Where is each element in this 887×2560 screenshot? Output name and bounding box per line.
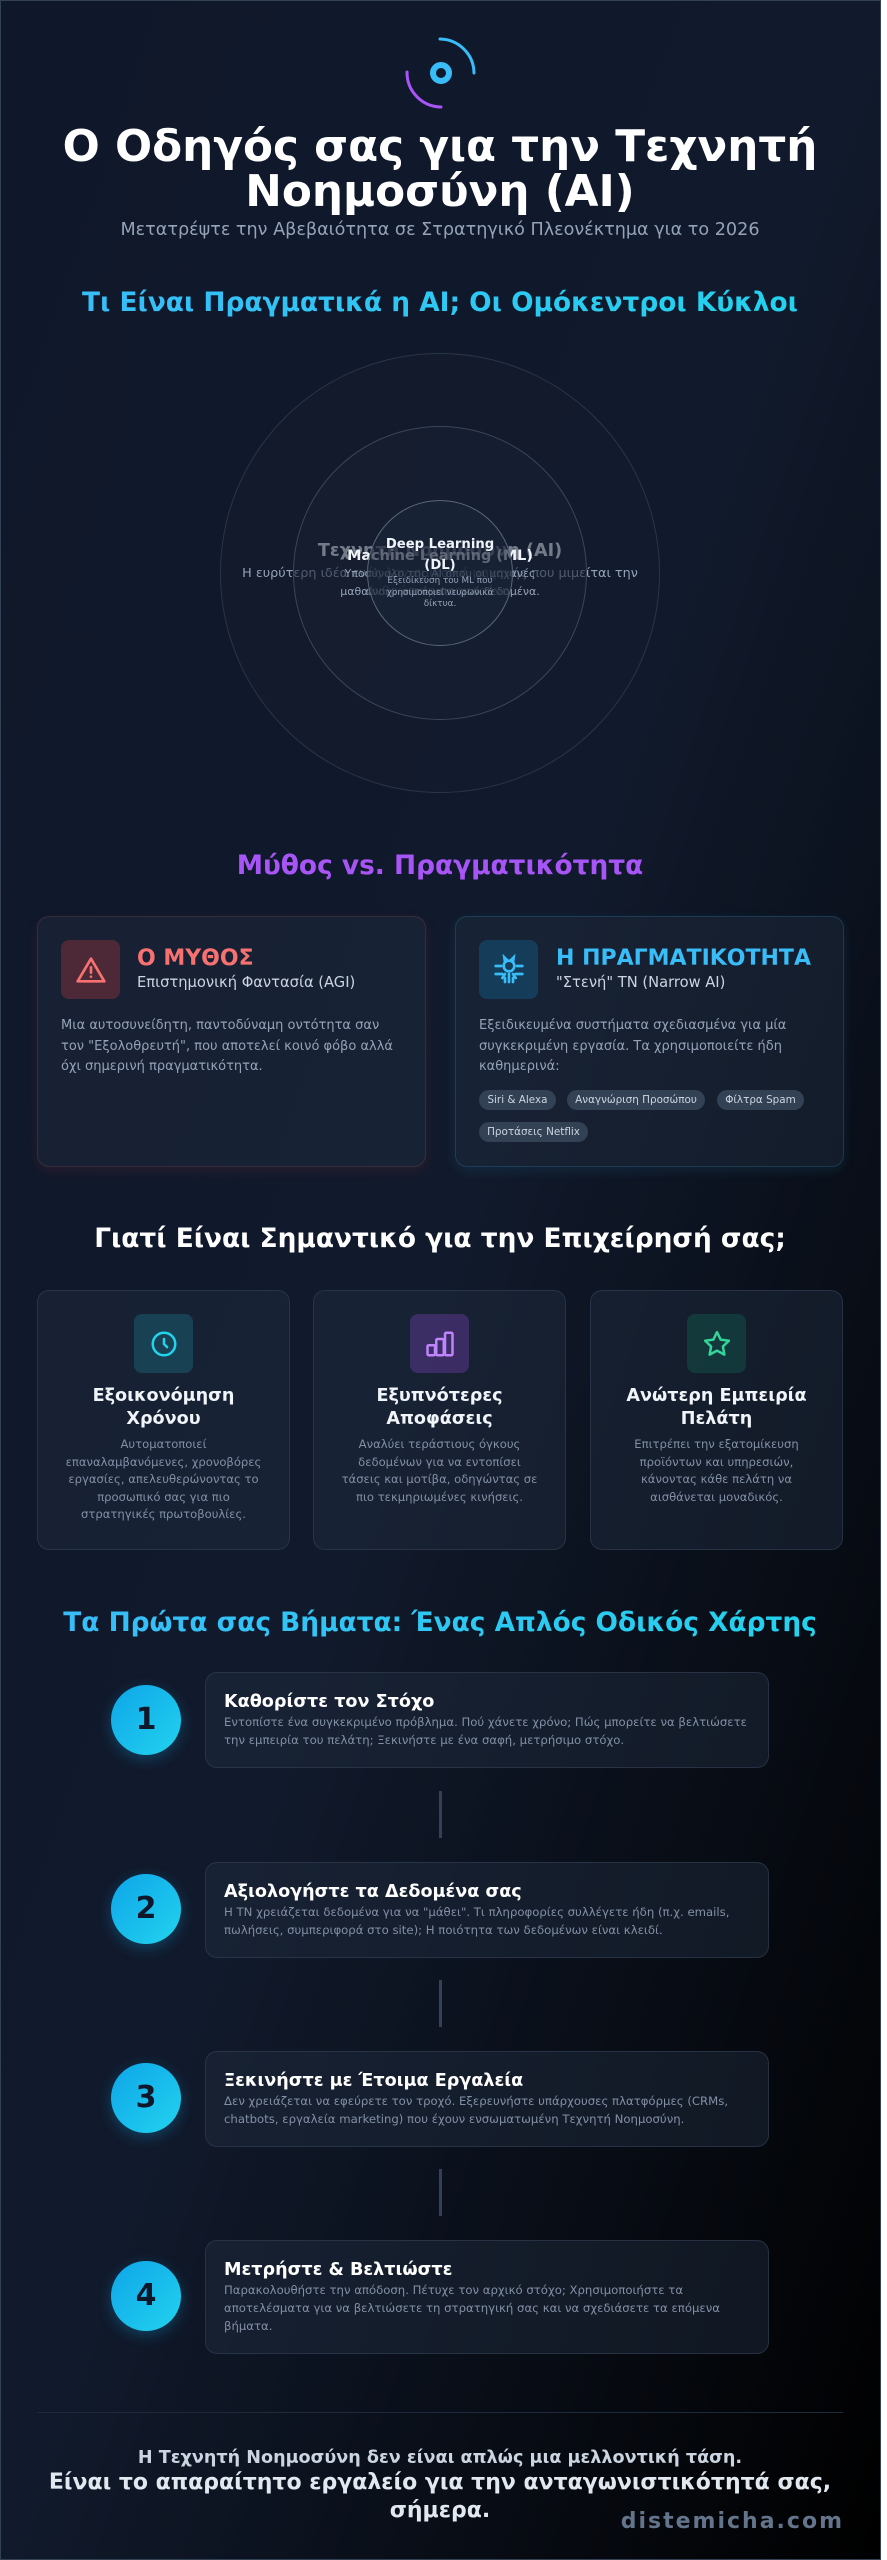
icon: logo <box>406 38 476 108</box>
text: customer experience: Επιτρέπει την εξατομίκευση <box>634 1437 799 1451</box>
text: myth: Μια αυτοσυνείδητη, παντοδύναμη οντότητα σαν <box>61 1018 379 1033</box>
text: myth: τον "Εξολοθρευτή", που αποτελεί κοινό φόβο αλλά <box>61 1038 393 1054</box>
tag <box>717 1090 804 1110</box>
step text 4: βήματα. <box>224 2319 272 2333</box>
heading: time saving: Χρόνου <box>126 1409 201 1429</box>
step text 4: Παρακολουθήστε την απόδοση. Πέτυχε τον αρχικό στόχο; Χρησιμοποιήστε τα <box>224 2283 683 2297</box>
text: reality <box>479 1018 786 1074</box>
connector <box>439 2169 442 2216</box>
step number 3: 3 <box>136 2080 156 2115</box>
description: DL: δίκτυα. <box>424 599 456 609</box>
step text 3: Δεν χρειάζεται να εφεύρετε τον τροχό. Εξερευνήστε υπάρχουσες πλατφόρμες (CRMs, <box>224 2094 728 2108</box>
step number 1 <box>111 1685 181 1755</box>
step text 1: την εμπειρία του πελάτη; Ξεκινήστε με ένα σαφή, μετρήσιμο στόχο. <box>224 1733 624 1747</box>
icon: star <box>687 1314 746 1373</box>
panel: time saving <box>37 1290 290 1550</box>
text: reality: συγκεκριμένη εργασία. Τα χρησιμοποιείτε ήδη <box>479 1038 782 1054</box>
heading: customer experience <box>626 1386 807 1429</box>
step card 4 <box>205 2240 769 2354</box>
watermark: distemicha.com <box>621 2509 844 2534</box>
text: myth: όχι σημερινή πραγματικότητα. <box>61 1059 263 1074</box>
footer line 1: Η Τεχνητή Νοημοσύνη δεν είναι απλώς μια μελλοντική τάση. <box>138 2448 742 2468</box>
tag <box>479 1090 556 1110</box>
subheading: reality: "Στενή" ΤΝ (Narrow AI) <box>556 974 725 991</box>
text: smarter decisions: τάσεις και μοτίβα, οδηγώντας σε <box>342 1472 537 1486</box>
description: DL: χρησιμοποιεί νευρωνικά <box>387 588 493 598</box>
step text 3: chatbots, εργαλεία marketing) που έχουν ενσωματωμένη Τεχνητή Νοημοσύνη. <box>224 2112 684 2126</box>
label: ML: Machine Learning (ML) <box>347 548 533 564</box>
circle: ML <box>293 426 587 720</box>
label: DL: Deep Learning <box>386 537 494 552</box>
connector <box>439 1980 442 2027</box>
heading: reality: Η ΠΡΑΓΜΑΤΙΚΟΤΗΤΑ <box>556 946 811 971</box>
heading: smarter decisions <box>376 1386 503 1429</box>
text: smarter decisions: δεδομένων για να εντοπίσει <box>358 1455 521 1469</box>
text: smarter decisions <box>342 1437 537 1504</box>
panel: myth <box>37 916 426 1167</box>
text: smarter decisions: πιο τεκμηριωμένες κινήσεις. <box>356 1490 523 1504</box>
step text 1 <box>224 1715 747 1747</box>
heading: roadmap: Τα Πρώτα σας Βήματα: Ένας Απλός Οδικός Χάρτης <box>63 1607 817 1638</box>
step card 3 <box>205 2051 769 2147</box>
text: customer experience: αισθάνεται μοναδικός. <box>650 1490 783 1504</box>
step title 2: Αξιολογήστε τα Δεδομένα σας <box>224 1882 522 1902</box>
description: ML: Υποσύνολο της AI όπου οι μηχανές <box>345 567 535 580</box>
chart: concentric circles <box>220 353 660 793</box>
tag <box>479 1122 588 1142</box>
text: time saving: στρατηγικές πρωτοβουλίες. <box>81 1507 246 1521</box>
icon: bug chip <box>479 940 538 999</box>
heading: concentric circles: Τι Είναι Πραγματικά η AI; Οι Ομόκεντροι Κύκλοι <box>82 287 798 318</box>
step number 4 <box>111 2261 181 2331</box>
title: Ο Οδηγός σας για την Τεχνητή <box>63 121 817 172</box>
panel: reality <box>455 916 844 1167</box>
panel: smarter decisions <box>313 1290 566 1550</box>
step text 4: αποτελέσματα για να βελτιώσετε τη στρατηγική σας και να σχεδιάσετε τα επόμενα <box>224 2301 720 2315</box>
description: ML: μαθαίνουν αυτόματα από δεδομένα. <box>340 585 540 598</box>
heading: customer experience: Πελάτη <box>681 1409 752 1429</box>
step number 3 <box>111 2063 181 2133</box>
heading: myth: Ο ΜΥΘΟΣ <box>137 946 254 971</box>
text: time saving: επαναλαμβανόμενες, χρονοβόρες <box>66 1455 261 1469</box>
icon: clock <box>134 1314 193 1373</box>
step number 2: 2 <box>136 1891 156 1926</box>
text: reality: Εξειδικευμένα συστήματα σχεδιασμένα για μία <box>479 1018 786 1033</box>
tag <box>567 1090 705 1110</box>
tag: Siri & Alexa <box>487 1094 548 1106</box>
text: smarter decisions: Αναλύει τεράστιους όγκους <box>359 1437 520 1451</box>
subheading: myth: Επιστημονική Φαντασία (AGI) <box>137 974 355 991</box>
icon: bar chart <box>410 1314 469 1373</box>
step text 2: πωλήσεις, συμπεριφορά στο site); Η ποιότητα των δεδομένων είναι κλειδί. <box>224 1923 663 1937</box>
heading: time saving <box>93 1386 234 1429</box>
label: DL <box>386 537 494 573</box>
circle: DL <box>367 500 513 646</box>
step number 4: 4 <box>136 2278 156 2313</box>
subtitle: Μετατρέψτε την Αβεβαιότητα σε Στρατηγικό Πλεονέκτημα για το 2026 <box>120 220 760 240</box>
text: time saving: προσωπικό σας για πιο <box>97 1490 230 1504</box>
step text 2: Η ΤΝ χρειάζεται δεδομένα για να "μάθει". Τι πληροφορίες συλλέγετε ήδη (π.χ. emails, <box>224 1905 729 1919</box>
tag: Προτάσεις Netflix <box>487 1126 580 1138</box>
description: AI: ανθρώπινη νοημοσύνη. <box>366 584 514 599</box>
connector <box>439 1791 442 1838</box>
text: reality: καθημερινά: <box>479 1059 560 1074</box>
label: AI: Τεχνητή Νοημοσύνη (AI) <box>318 541 562 561</box>
step card 2 <box>205 1862 769 1958</box>
footer line 2 <box>49 2470 831 2522</box>
heading: why it matters: Γιατί Είναι Σημαντικό για την Επιχείρησή σας; <box>94 1223 786 1254</box>
label: DL: (DL) <box>424 558 456 573</box>
heading: smarter decisions: Εξυπνότερες <box>376 1386 503 1406</box>
circle: AI <box>220 353 660 793</box>
icon: warning <box>61 940 120 999</box>
panel: customer experience <box>590 1290 843 1550</box>
text: customer experience: προϊόντων και υπηρεσιών, <box>640 1455 793 1469</box>
description: DL <box>387 576 493 609</box>
description: ML <box>340 567 540 598</box>
text: myth <box>61 1018 393 1074</box>
text: customer experience: κάνοντας κάθε πελάτη να <box>641 1472 792 1486</box>
text: time saving <box>66 1437 261 1521</box>
description: AI: Η ευρύτερη ιδέα ενός λογισμικού ή μηχανής που μιμείται την <box>242 566 638 581</box>
heading: customer experience: Ανώτερη Εμπειρία <box>626 1386 807 1406</box>
divider <box>37 2412 843 2413</box>
heading: time saving: Εξοικονόμηση <box>93 1386 234 1406</box>
description: AI <box>242 566 638 599</box>
step card 1 <box>205 1672 769 1768</box>
step text 2 <box>224 1905 729 1937</box>
text: time saving: Αυτοματοποιεί <box>120 1437 206 1451</box>
text: time saving: εργασίες, απελευθερώνοντας το <box>68 1472 259 1486</box>
step text 4 <box>224 2283 720 2333</box>
title <box>63 121 817 217</box>
step title 3: Ξεκινήστε με Έτοιμα Εργαλεία <box>224 2071 523 2091</box>
step title 4: Μετρήστε & Βελτιώστε <box>224 2260 452 2280</box>
title: Νοημοσύνη (AI) <box>245 166 635 217</box>
text: customer experience <box>634 1437 799 1504</box>
footer line 2: σήμερα. <box>390 2498 490 2522</box>
footer line 2: Είναι το απαραίτητο εργαλείο για την ανταγωνιστικότητά σας, <box>49 2470 831 2495</box>
tag: Αναγνώριση Προσώπου <box>575 1094 697 1106</box>
step text 1: Εντοπίστε ένα συγκεκριμένο πρόβλημα. Πού χάνετε χρόνο; Πώς μπορείτε να βελτιώσετε <box>224 1715 747 1729</box>
step number 2 <box>111 1874 181 1944</box>
step text 3 <box>224 2094 728 2126</box>
step title 1: Καθορίστε τον Στόχο <box>224 1692 434 1712</box>
tag: Φίλτρα Spam <box>725 1094 796 1106</box>
description: DL: Εξειδίκευση του ML που <box>387 576 493 586</box>
heading: smarter decisions: Αποφάσεις <box>386 1409 493 1429</box>
step number 1: 1 <box>136 1702 156 1737</box>
heading: myth vs reality: Μύθος vs. Πραγματικότητα <box>237 850 643 881</box>
